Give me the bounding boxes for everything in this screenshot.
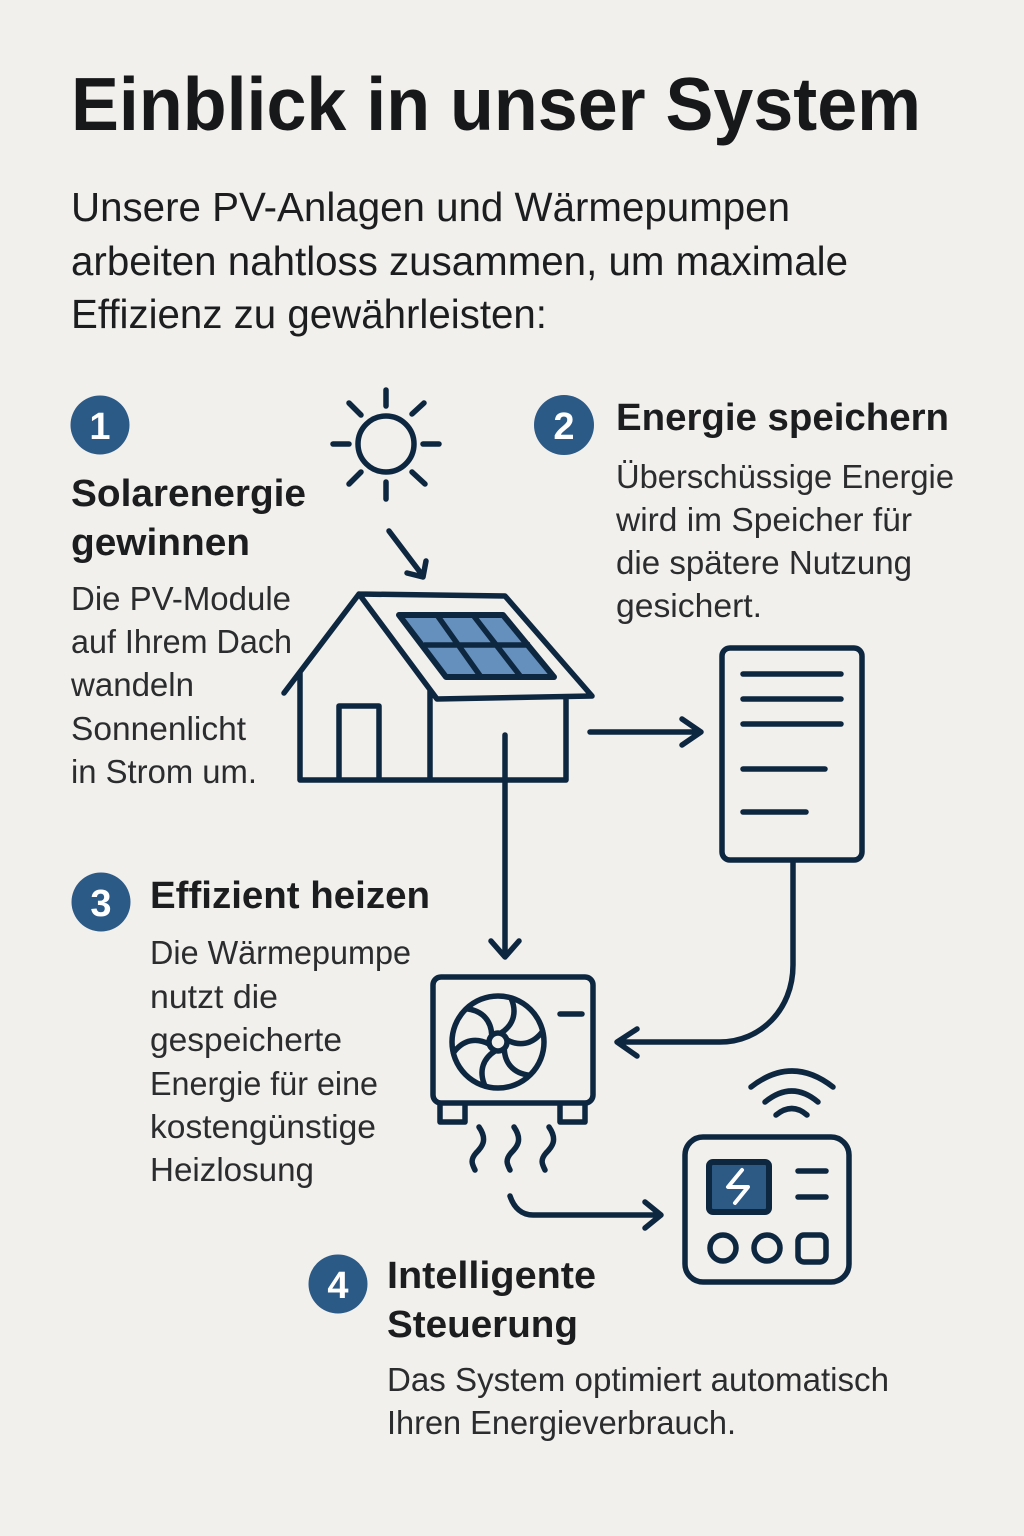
description: step 2: wird im Speicher für	[615, 501, 912, 538]
icon: wifi signal	[751, 1071, 833, 1115]
description: step 4	[387, 1361, 889, 1441]
intro text: Effizienz zu gewährleisten:	[71, 291, 547, 337]
heading: Effizient heizen: Effizient heizen	[150, 875, 430, 917]
description: step 4: Das System optimiert automatisch	[387, 1361, 889, 1398]
icon: house with solar panels	[284, 594, 592, 780]
description: step 1	[70, 580, 292, 790]
number badge 2: 2	[553, 406, 575, 448]
description: step 3: Heizlosung	[150, 1151, 314, 1188]
step 1: Solarenergie gewinnen	[70, 396, 306, 790]
intro text: Unsere PV-Anlagen und Wärmepumpen	[71, 184, 790, 230]
number badge 1	[70, 396, 130, 454]
house outline	[284, 594, 592, 780]
description: step 1: wandeln	[70, 666, 194, 703]
description: step 1: Die PV-Module	[71, 580, 291, 617]
number badge 1: 1	[89, 406, 111, 448]
step 2: Energie speichern	[534, 395, 954, 624]
description: step 1: in Strom um.	[71, 753, 257, 790]
arrow: storage to heat pump	[617, 862, 793, 1056]
heading: Solarenergie gewinnen: Solarenergie	[71, 473, 306, 515]
intro text	[71, 184, 848, 337]
icon: heat pump	[433, 977, 593, 1122]
number badge 3: 3	[90, 883, 112, 925]
description: step 2	[615, 458, 954, 624]
number badge 4	[308, 1254, 368, 1314]
heading: Solarenergie gewinnen	[71, 473, 306, 564]
description: step 1: auf Ihrem Dach	[71, 623, 292, 660]
fan	[452, 996, 544, 1088]
description: step 4: Ihren Energieverbrauch.	[387, 1404, 736, 1441]
heading: Intelligente Steuerung: Steuerung	[387, 1304, 578, 1346]
arrow: sun to roof	[389, 531, 426, 577]
description: step 1: Sonnenlicht	[71, 710, 246, 747]
title: Einblick in unser System	[71, 62, 921, 146]
description: step 2: die spätere Nutzung	[616, 544, 912, 581]
heading: Intelligente Steuerung	[387, 1255, 596, 1346]
intro text: arbeiten nahtloss zusammen, um maximale	[71, 238, 848, 284]
icon: energy storage unit	[722, 648, 862, 860]
arrow: heat pump to controller	[510, 1196, 661, 1228]
description: step 3: nutzt die	[150, 978, 278, 1015]
number badge 2	[534, 395, 594, 455]
description: step 2: gesichert.	[616, 587, 762, 624]
step 3: Effizient heizen	[72, 872, 430, 1188]
description: step 3	[150, 934, 411, 1188]
description: step 3: Die Wärmepumpe	[150, 934, 411, 971]
number badge 3	[72, 872, 130, 932]
step 4: Intelligente Steuerung	[308, 1254, 889, 1441]
controller buttons	[710, 1171, 826, 1262]
solar panels	[399, 615, 554, 677]
icon: heat waves	[472, 1127, 554, 1170]
controller screen	[709, 1162, 769, 1212]
heading: Energie speichern: Energie speichern	[616, 397, 949, 439]
number badge 4: 4	[327, 1265, 349, 1307]
description: step 3: kostengünstige	[150, 1108, 376, 1145]
icon: smart controller	[685, 1137, 849, 1282]
icon: sun	[333, 390, 439, 499]
heading: Solarenergie gewinnen: gewinnen	[71, 522, 250, 564]
description: step 3: Energie für eine	[150, 1065, 378, 1102]
arrow: house to storage	[590, 719, 701, 745]
heading: Intelligente Steuerung: Intelligente	[387, 1255, 596, 1297]
description: step 2: Überschüssige Energie	[616, 458, 954, 495]
arrow: house down to heat pump	[491, 735, 519, 957]
description: step 3: gespeicherte	[150, 1021, 342, 1058]
